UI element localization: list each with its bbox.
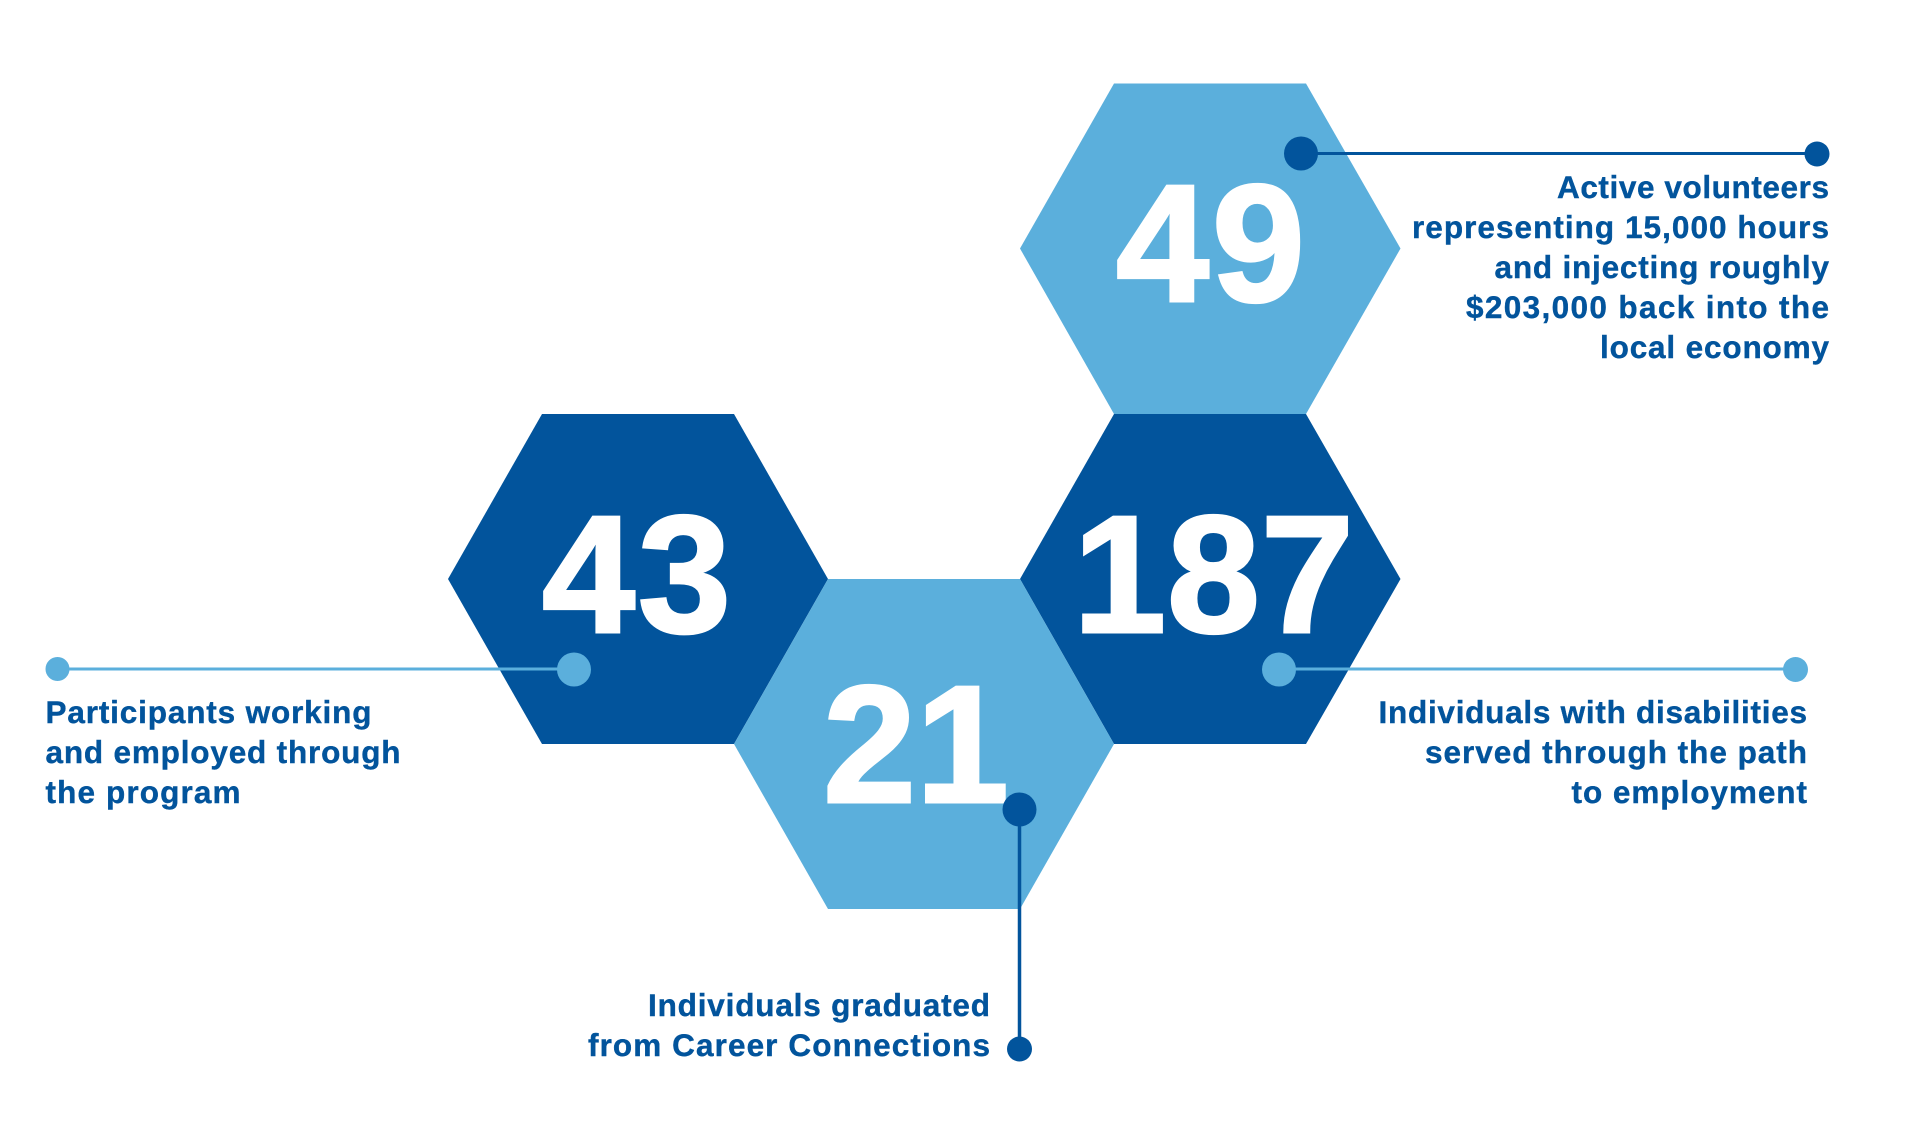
hexagon: 21 graduates [734, 579, 1114, 909]
callout connector: 49 [1284, 136, 1830, 170]
callout text: 49: Active volunteers [1557, 169, 1829, 205]
callout text: 43 [46, 694, 400, 810]
callout text: 43: the program [46, 774, 240, 810]
callout text: 21: Individuals graduated [648, 987, 990, 1023]
callout text: 187 [1378, 694, 1808, 810]
callout text: 21 [588, 987, 990, 1063]
hexagon: 187 individuals: 187 [1073, 482, 1355, 668]
callout text: 187: Individuals with disabilities [1378, 694, 1807, 730]
hexagon: 49 volunteers [1020, 84, 1400, 414]
callout text: 43: and employed through [46, 734, 400, 770]
hexagon: 43 participants [448, 414, 828, 744]
hexagon: 43 participants: 43 [542, 482, 734, 668]
callout text: 49 [1412, 169, 1829, 365]
callout text: 187: served through the path [1425, 734, 1807, 770]
callout text: 49: representing 15,000 hours [1412, 209, 1829, 245]
callout text: 187: to employment [1572, 774, 1808, 810]
callout text: 49: local economy [1600, 329, 1829, 365]
hexagon: 187 individuals [1020, 414, 1400, 744]
callout connector: 187 [1262, 652, 1808, 686]
callout text: 43: Participants working [46, 694, 372, 730]
callout text: 21: from Career Connections [588, 1027, 990, 1063]
hexagon: 21 graduates: 21 [823, 652, 1009, 838]
callout text: 49: and injecting roughly [1494, 249, 1829, 285]
callout connector: 43 [46, 652, 591, 686]
callout connector: 21 [1002, 792, 1036, 1062]
callout text: 49: $203,000 back into the [1466, 289, 1829, 325]
hexagon: 49 volunteers: 49 [1116, 151, 1308, 337]
